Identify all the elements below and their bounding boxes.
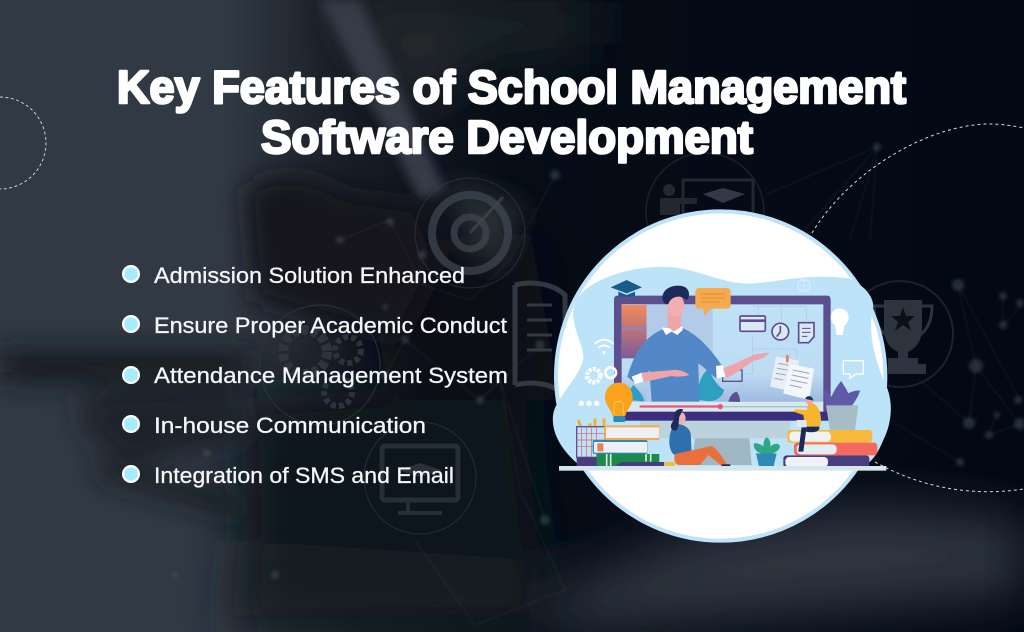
white circle bbox=[556, 211, 885, 541]
background icon: open book bbox=[515, 283, 565, 395]
background icon: monitor bbox=[364, 422, 476, 534]
monitor bbox=[614, 296, 831, 421]
white decor icons bbox=[579, 279, 863, 406]
item: communication: In-house Communication bbox=[154, 413, 426, 438]
shelf bbox=[559, 466, 886, 471]
item: sms and email: Integration of SMS and Email bbox=[154, 463, 454, 488]
title: Software Development bbox=[261, 111, 753, 163]
seated boy bbox=[793, 396, 821, 452]
dashed circle left bbox=[0, 97, 46, 189]
books stack right bbox=[783, 430, 877, 468]
light bulb bbox=[605, 383, 633, 422]
feature list bbox=[122, 263, 508, 488]
item: attendance: Attendance Management System bbox=[154, 363, 508, 388]
pencil cup and book stack left bbox=[577, 418, 675, 467]
papers bbox=[770, 355, 814, 400]
title: Key Features of School Management bbox=[117, 61, 906, 113]
screen icons bbox=[740, 307, 814, 373]
dashed circle right bbox=[812, 124, 1024, 492]
faint network lines and nodes bbox=[172, 143, 1024, 625]
teacher bbox=[627, 286, 769, 402]
title bbox=[117, 61, 906, 163]
background icon: trophy bbox=[847, 281, 953, 387]
background icon: gears bbox=[260, 305, 380, 425]
background icon: target bbox=[415, 178, 525, 288]
potted plant right bbox=[824, 381, 860, 430]
seated woman bbox=[669, 409, 730, 467]
background icon: teacher at board bbox=[646, 153, 764, 271]
illustration: online classroom bbox=[553, 211, 891, 541]
item: admission: Admission Solution Enhanced bbox=[154, 263, 465, 288]
plants on screen bbox=[629, 368, 742, 402]
monitor stand bbox=[640, 418, 790, 465]
blue blob bbox=[553, 267, 891, 468]
item: academic conduct: Ensure Proper Academic Conduct bbox=[154, 313, 507, 338]
speech bubble on monitor bbox=[695, 288, 731, 316]
graduation cap bbox=[611, 280, 642, 297]
small potted plant bbox=[754, 437, 780, 468]
